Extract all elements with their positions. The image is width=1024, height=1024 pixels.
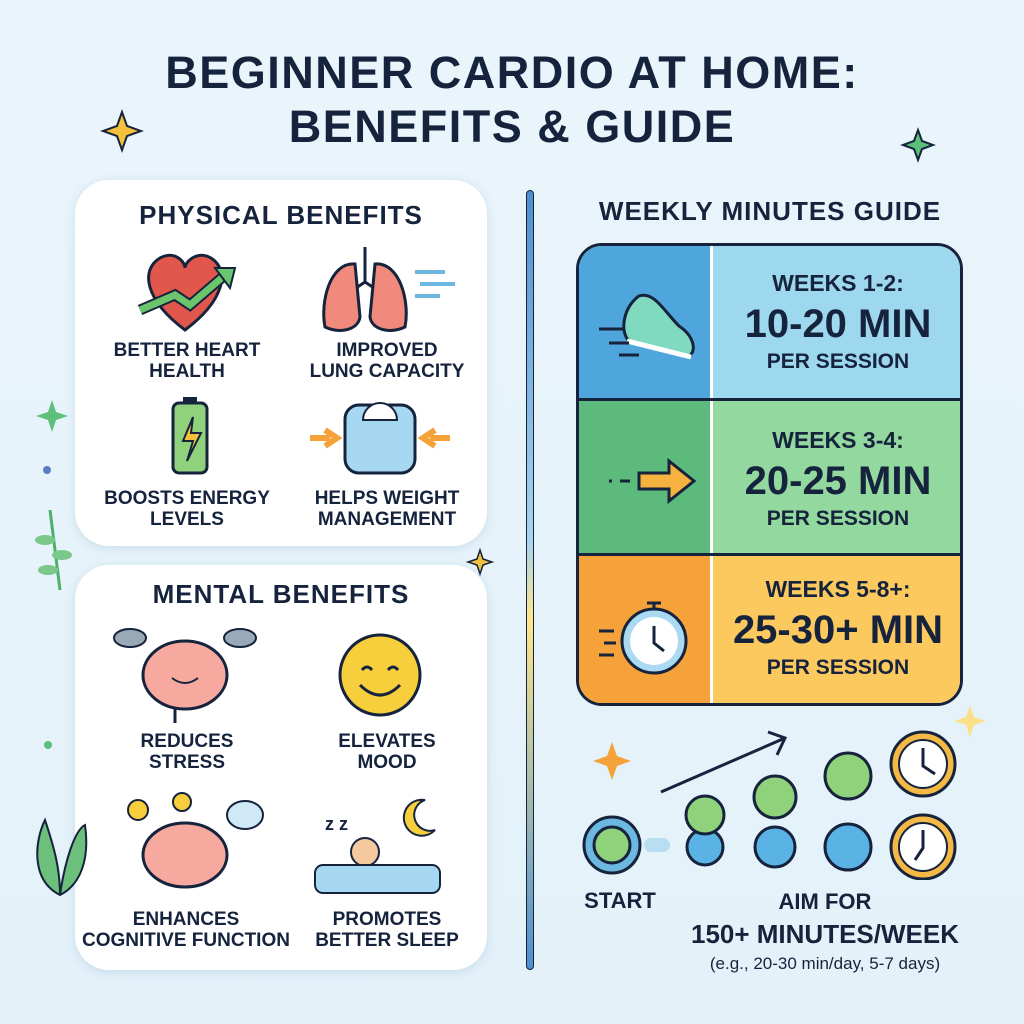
label: heart: BETTER HEART <box>114 340 260 361</box>
label: energy: BOOSTS ENERGY <box>104 488 270 509</box>
row 3: PER SESSION <box>767 656 909 679</box>
title: BEGINNER CARDIO AT HOME: <box>165 47 859 98</box>
label: weight: HELPS WEIGHT <box>315 488 459 509</box>
text: aim for <box>691 889 959 973</box>
text: aim for: 150+ MINUTES/WEEK <box>691 919 959 949</box>
row 2: PER SESSION <box>767 507 909 530</box>
label: mood <box>338 731 436 773</box>
row 1: WEEKS 1-2: <box>772 270 904 296</box>
row 1: 10-20 MIN <box>745 302 931 346</box>
icon: sleep <box>314 798 441 894</box>
label: stress <box>141 731 233 773</box>
icon: brain stress <box>113 628 257 723</box>
text: aim for: (e.g., 20-30 min/day, 5-7 days) <box>710 954 940 973</box>
label: cognitive: COGNITIVE FUNCTION <box>82 930 290 951</box>
row 2 <box>579 401 960 556</box>
row 3: WEEKS 5-8+: <box>765 576 911 602</box>
heading: weekly guide: WEEKLY MINUTES GUIDE <box>599 196 941 226</box>
label: start: START <box>584 888 656 913</box>
label: lungs <box>310 340 464 382</box>
label: cognitive <box>82 909 290 951</box>
panel: physical benefits <box>75 180 487 546</box>
label: lungs: LUNG CAPACITY <box>310 361 464 382</box>
label: mood: MOOD <box>357 752 417 773</box>
icon: shoe <box>599 294 695 360</box>
icon: smiley <box>338 634 422 716</box>
row 2: 20-25 MIN <box>745 459 931 503</box>
heading: mental: MENTAL BENEFITS <box>153 579 409 609</box>
row 3: 25-30+ MIN <box>733 608 943 652</box>
label: cognitive: ENHANCES <box>133 909 239 930</box>
title <box>165 47 859 152</box>
label: sleep <box>315 909 459 951</box>
label: stress: REDUCES <box>141 731 233 752</box>
divider <box>526 190 534 970</box>
icon: stopwatch <box>599 602 688 674</box>
label: mood: ELEVATES <box>338 731 436 752</box>
label: heart: HEALTH <box>149 361 225 382</box>
icon: scale <box>310 402 450 474</box>
row 1: PER SESSION <box>767 350 909 373</box>
label: sleep: PROMOTES <box>333 909 441 930</box>
panel: mental benefits <box>75 565 487 970</box>
icon: sleep: z z <box>325 814 348 834</box>
label: sleep: BETTER SLEEP <box>315 930 459 951</box>
icon: arrow <box>609 458 696 504</box>
row 1 <box>579 246 960 401</box>
icon: plants <box>35 510 88 896</box>
chart: progression circles <box>582 730 956 880</box>
label: weight <box>315 488 460 530</box>
text: aim for: AIM FOR <box>779 889 871 914</box>
label: lungs: IMPROVED <box>336 340 438 361</box>
label: stress: STRESS <box>149 752 225 773</box>
label: weight: MANAGEMENT <box>318 509 456 530</box>
label: energy <box>104 488 270 530</box>
row 3 <box>579 556 960 709</box>
label: energy: LEVELS <box>150 509 224 530</box>
icon: brain ideas <box>127 792 264 888</box>
icon: battery <box>172 397 208 474</box>
table: weekly guide <box>576 243 963 706</box>
icon: lungs <box>322 247 455 332</box>
label: heart <box>114 340 260 382</box>
heading: physical: PHYSICAL BENEFITS <box>139 200 423 230</box>
row 2: WEEKS 3-4: <box>772 427 904 453</box>
icon: heart <box>138 254 236 332</box>
title: BENEFITS & GUIDE <box>289 101 735 152</box>
